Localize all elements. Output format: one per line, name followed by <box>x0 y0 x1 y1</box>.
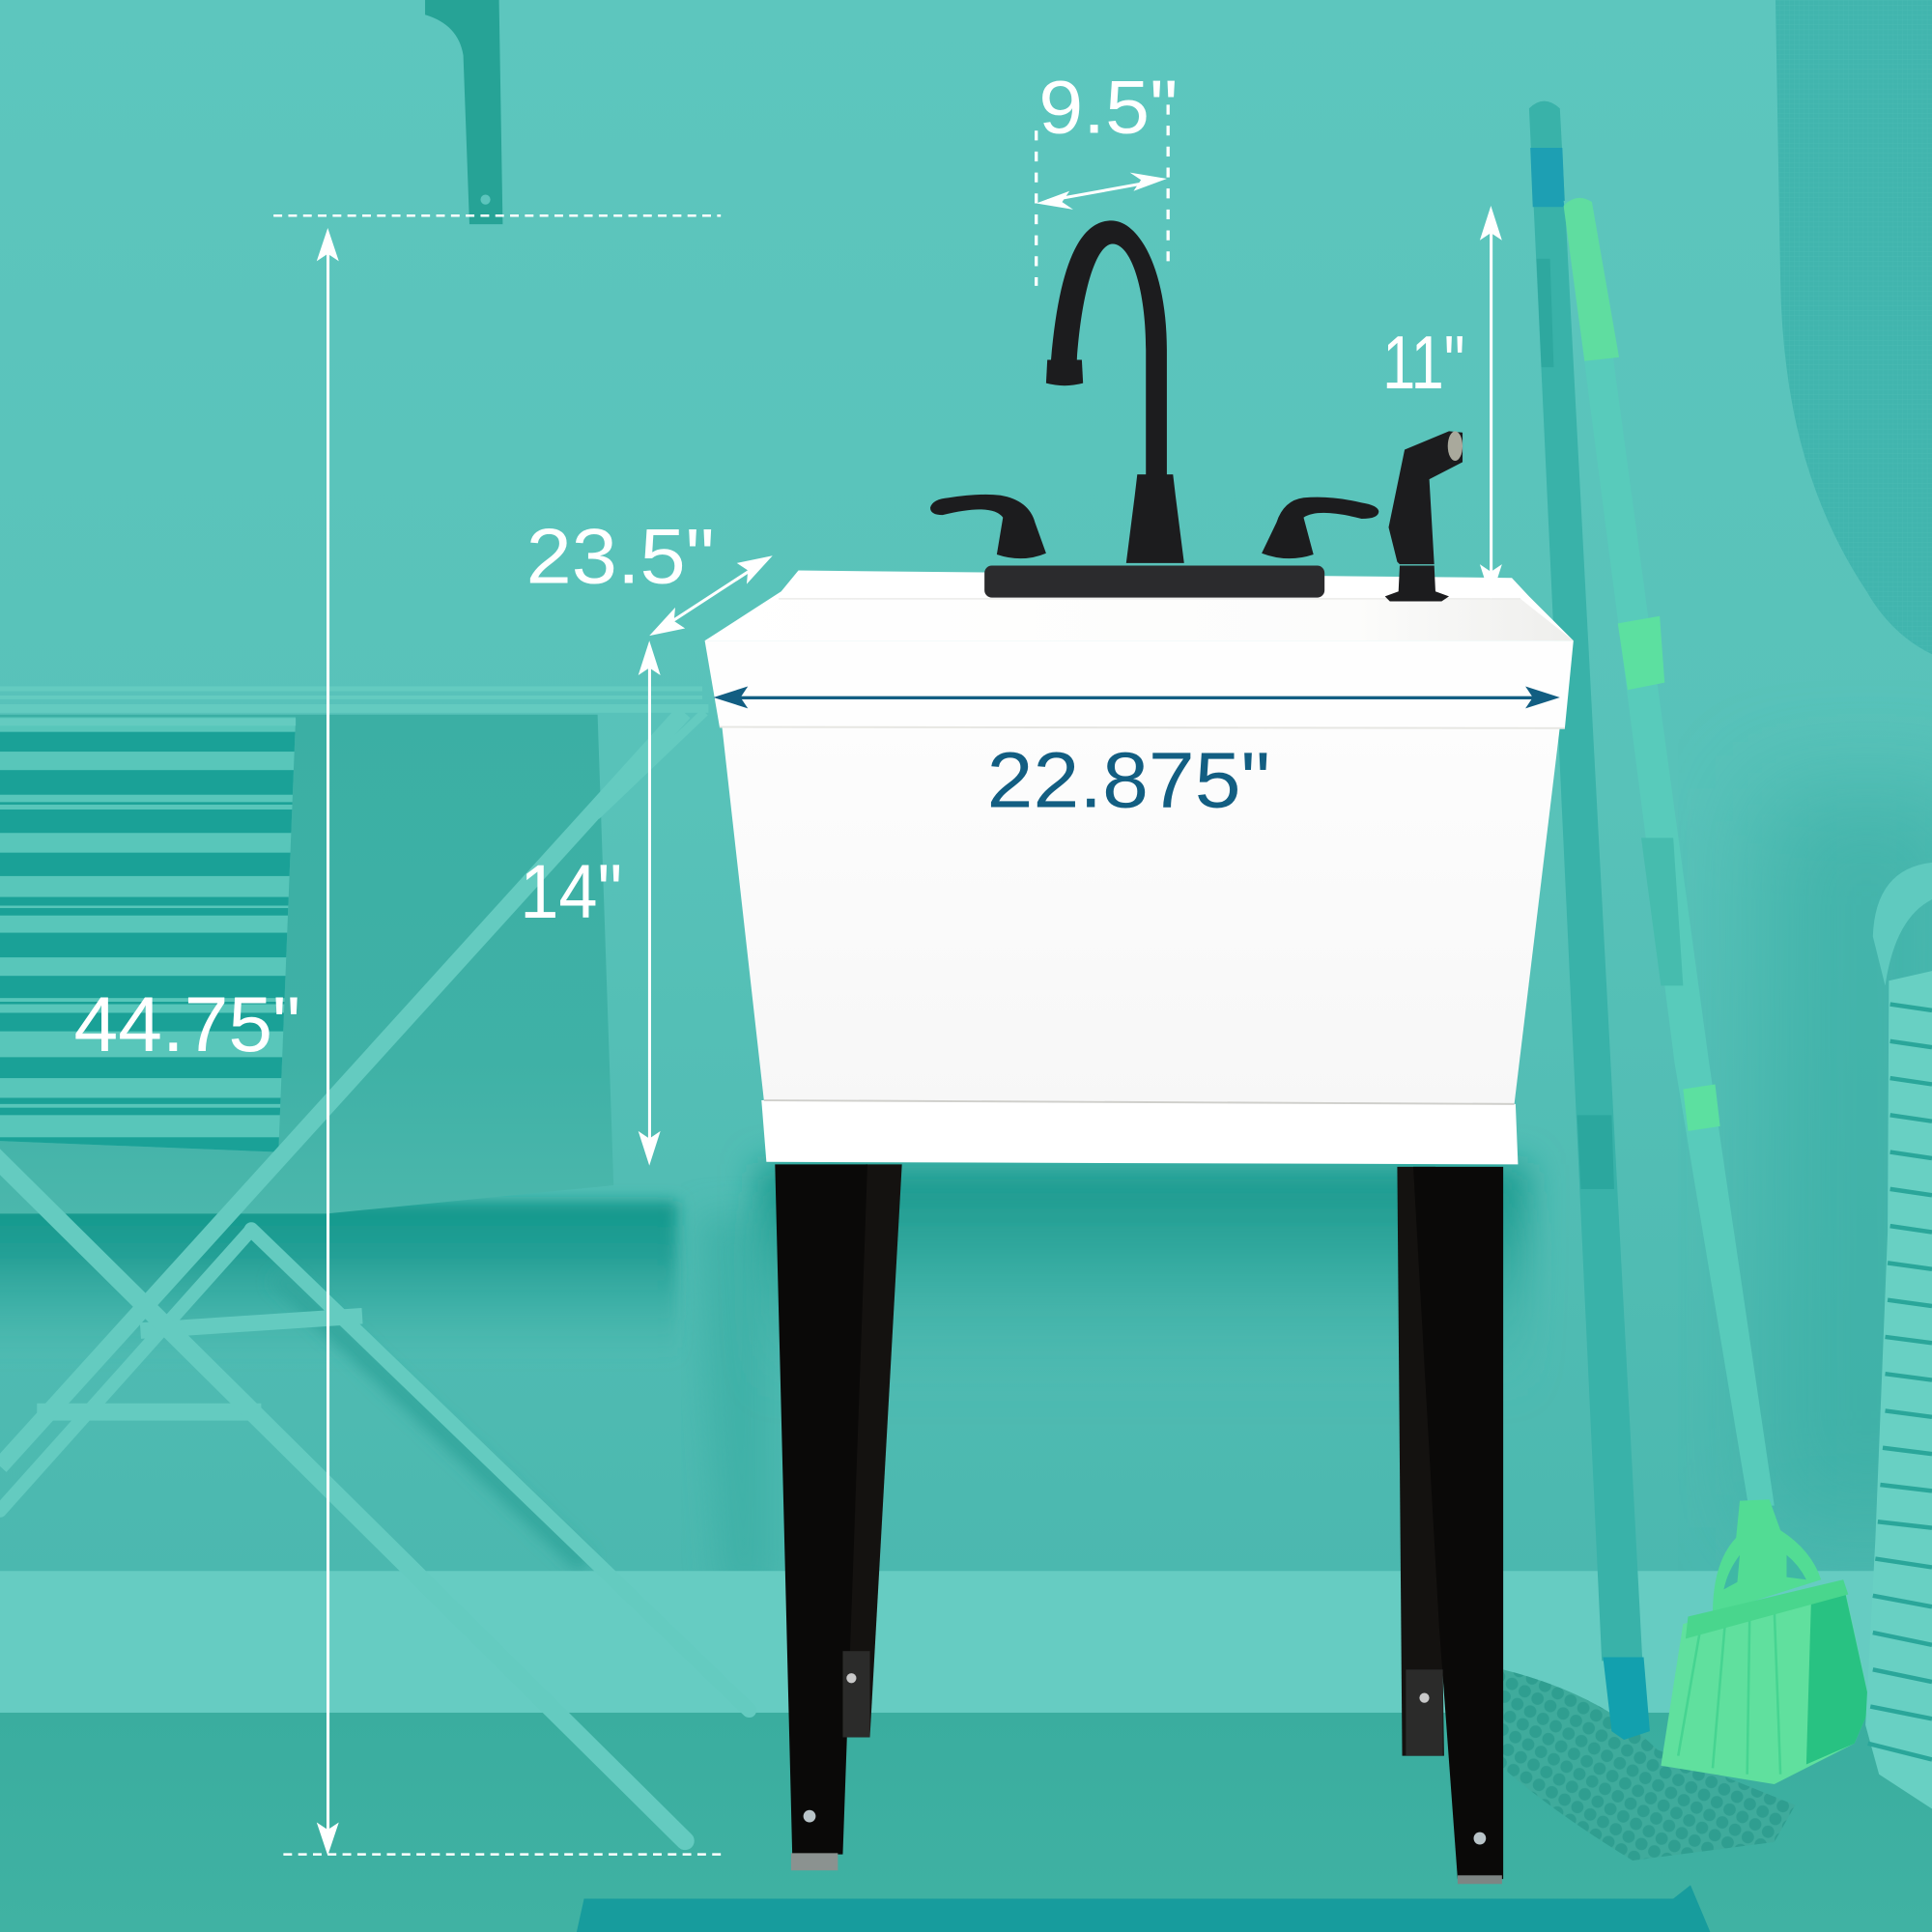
faucet width dashed guides <box>1037 104 1168 286</box>
towel with stripes <box>0 717 296 1152</box>
shadow: rack strut on wall <box>277 1275 585 1565</box>
label: 11 in: 11" <box>1382 322 1465 405</box>
label: 23.5 in: 23.5" <box>526 513 715 600</box>
faucet spout <box>1051 220 1167 480</box>
faucet handle: right <box>1262 497 1378 558</box>
arrow: 14 in depth <box>639 640 661 1166</box>
mop head <box>1503 1658 1795 1861</box>
sink leg: left <box>775 1164 902 1870</box>
faucet deck plate <box>984 565 1324 598</box>
broom frame <box>1713 1499 1821 1614</box>
laundry bag with stripes <box>1865 863 1932 1808</box>
bottom dashed guide <box>283 1854 727 1856</box>
sink back rim <box>705 571 1574 640</box>
top dashed guide <box>273 214 721 216</box>
sink front rim <box>705 640 1574 728</box>
label: 22.875 in: 22.875" <box>987 736 1270 824</box>
arrow: 22.875 in width <box>714 686 1560 708</box>
ironing board <box>1776 0 1932 654</box>
broom bristles <box>1661 1582 1870 1784</box>
sink leg: right <box>1397 1167 1503 1884</box>
shadow: right wall <box>1762 788 1932 1528</box>
background: floor <box>0 1713 1932 1932</box>
shadow: sheet on wall <box>0 1202 678 1361</box>
faucet base <box>1126 474 1184 563</box>
shadow: left of sink <box>696 1213 770 1589</box>
broom header <box>1686 1579 1848 1638</box>
broom <box>1564 198 1870 1784</box>
arrow: 9.5 in spout reach <box>1037 173 1167 210</box>
sink lower lip <box>761 1100 1518 1164</box>
arrow: 23.5 in width <box>649 555 773 636</box>
floor rug <box>577 1886 1710 1932</box>
mop pole <box>1529 101 1642 1661</box>
arrow: 11 in clearance <box>1480 206 1502 599</box>
label: 14 in: 14" <box>520 848 622 934</box>
broom handle <box>1564 201 1775 1506</box>
shelf bracket <box>425 0 502 224</box>
shadow: beneath sink <box>757 1164 1528 1399</box>
broom handle grip <box>1564 198 1619 361</box>
broom handle bands <box>1618 616 1664 690</box>
faucet handle: left <box>930 495 1046 558</box>
side sprayer <box>1389 431 1463 564</box>
background: baseboard <box>0 1571 1932 1714</box>
sink tub <box>705 571 1574 1164</box>
label: 9.5 in: 9.5" <box>1038 67 1178 150</box>
label: 44.75 in: 44.75" <box>74 981 300 1068</box>
drying rack front struts, rails and cross bars <box>0 689 708 1841</box>
arrow: 44.75 in height <box>317 228 339 1856</box>
sink body <box>722 727 1560 1104</box>
drying rack rear struts <box>0 1230 750 1710</box>
sink basin opening <box>705 599 1574 640</box>
sheet on drying rack <box>0 715 613 1213</box>
faucet <box>930 220 1463 601</box>
